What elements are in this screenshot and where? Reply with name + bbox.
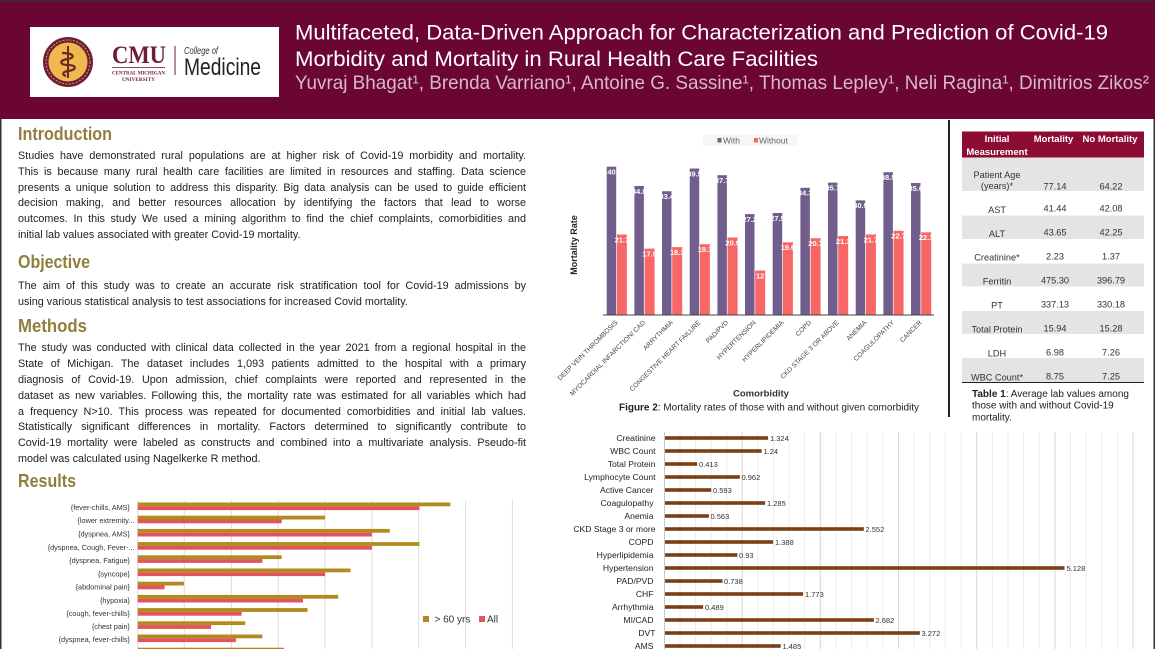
data labels: with: 39.5 — [687, 169, 702, 178]
table rows: WBC Count* — [971, 372, 1023, 382]
x axis category labels: ARRYTHMIA — [642, 319, 675, 352]
gold bars: over 60 years — [138, 502, 450, 649]
category labels: Active Cancer — [600, 485, 654, 495]
data labels: without: 22.3 — [919, 233, 934, 242]
table rows: 77.14 — [1044, 182, 1066, 192]
table rows: 7.25 — [1102, 372, 1120, 382]
text block: objective — [18, 280, 526, 308]
table rows: 43.65 — [1044, 228, 1066, 238]
category labels: {lower extremity... — [77, 516, 134, 525]
caption: table 1: mortality. — [972, 412, 1012, 424]
bars — [665, 436, 1064, 648]
table rows: 475.30 — [1041, 276, 1069, 286]
table rows: 8.75 — [1046, 372, 1064, 382]
legend: Without — [759, 136, 788, 146]
category labels: Arrhythmia — [612, 602, 654, 612]
poster title: Multifaceted, Data-Driven Approach for Characterization and Prediction of Covid-19 — [295, 20, 1108, 44]
category labels: {dyspnea, Cough, Fever-... — [48, 543, 134, 552]
table rows: 2.23 — [1046, 252, 1064, 262]
value labels: 0.962 — [742, 473, 760, 482]
CMU wordmark: CENTRAL MICHIGAN — [112, 70, 165, 76]
text block: introduction: outcomes. In this study We used a mining algorithm to find the chief complaints, comorbidities and — [18, 213, 526, 225]
category labels: {dyspnea, AMS} — [78, 530, 131, 538]
data labels: without: 18.3 — [670, 248, 685, 257]
bars: with comorbidity — [607, 167, 920, 315]
red bars: all patients — [138, 506, 419, 642]
text block: introduction: initial lab values associated with greater Covid-19 mortality. — [18, 229, 300, 241]
table rows: 396.79 — [1097, 276, 1125, 286]
y axis title: Mortality Rate — [569, 215, 579, 275]
table rows — [971, 170, 1125, 382]
table header — [966, 134, 1138, 158]
category labels: {hypoxia} — [100, 596, 131, 605]
poster title — [295, 20, 1108, 71]
x axis category labels: COAGULOPATHY — [853, 319, 897, 363]
table rows: 15.94 — [1044, 324, 1066, 334]
data labels: with: 35.6 — [908, 184, 923, 193]
chart: chief complaints mortality by age group — [48, 500, 512, 649]
table rows: 330.18 — [1097, 300, 1125, 310]
category labels: {dyspnea, Fatigue} — [69, 556, 131, 565]
category labels: Anemia — [624, 511, 654, 521]
data labels: with: 40 — [607, 168, 616, 176]
College of Medicine wordmark — [184, 45, 261, 81]
text block: introduction: decision making, and better resources allocation by identifying the factors that lead to worse — [18, 197, 526, 209]
value labels: 0.413 — [699, 460, 718, 469]
value labels: 0.563 — [710, 512, 729, 521]
data labels: without: 21.3 — [836, 237, 851, 246]
category labels: MI/CAD — [623, 615, 654, 625]
table header: Mortality — [1034, 134, 1074, 145]
data labels: without — [615, 232, 934, 280]
caption: table 1: Table 1: Average lab values among — [972, 389, 1129, 400]
caption: table 1 — [972, 389, 1129, 424]
table 1: average lab values — [962, 132, 1144, 383]
data labels: with: 35.7 — [825, 183, 840, 192]
category labels — [573, 433, 656, 649]
text block: methods — [18, 342, 526, 465]
table rows: Creatinine* — [974, 252, 1020, 262]
heading: Introduction: Introduction — [18, 124, 112, 144]
x axis category labels: MYOCARDIAL INFARCTION/ CAD — [569, 319, 647, 398]
category labels: Hypertension — [603, 563, 654, 573]
table rows: 337.13 — [1041, 300, 1069, 310]
data labels: without: 12 — [756, 271, 764, 280]
chart: figure 2 mortality by comorbidity — [557, 135, 934, 400]
category labels: {dyspnea, fever-chills} — [59, 635, 131, 644]
text block: introduction: Studies have demonstrated rural populations are at higher risk of Covid-19 morbidity and mortality. — [18, 150, 526, 162]
data labels: without: 20.9 — [725, 238, 740, 247]
College of Medicine wordmark: College of — [184, 45, 219, 57]
table rows: 41.44 — [1044, 204, 1066, 214]
data labels: without: 21.7 — [864, 235, 878, 244]
value labels: 5.128 — [1066, 564, 1085, 573]
data labels: with: 30.9 — [853, 201, 868, 210]
text block: introduction — [18, 150, 526, 241]
text block: objective: using various statistical analysis to test associations for increased Covid mortality. — [18, 296, 408, 308]
x axis category labels: CANCER — [899, 319, 924, 344]
table rows: LDH — [988, 348, 1006, 358]
text block: methods: State of Michigan. The dataset includes 1,093 patients admitted to the hospital with a primary — [18, 358, 526, 370]
text block: methods: diagnosis of Covid-19. Upon admission, chief complaints were reported and represented in the — [18, 374, 526, 386]
value labels: 2.552 — [866, 525, 884, 534]
value labels: 1.24 — [764, 447, 778, 456]
data labels: without: 17.9 — [642, 249, 657, 258]
table rows: 42.25 — [1100, 228, 1122, 238]
caption: table 1: those with and without Covid-19 — [972, 400, 1114, 412]
category labels: Lymphocyte Count — [584, 472, 656, 482]
x axis category labels: DEEP VEIN THROMBOSIS — [557, 319, 620, 382]
data labels: with — [607, 168, 923, 224]
data labels: without: 19.6 — [781, 243, 795, 252]
x axis category labels: COPD — [795, 319, 813, 338]
table rows: 64.22 — [1100, 182, 1122, 192]
heading: Methods: Methods — [18, 316, 87, 336]
category labels: DVT — [638, 628, 656, 638]
value labels: 1.388 — [775, 538, 794, 547]
x axis category labels: ANEMIA — [845, 319, 869, 342]
text block: methods: dataset as new variables. Following this, the mortality rate was estimated for all variables which had — [18, 390, 526, 402]
legend: > 60 yrs — [434, 614, 470, 626]
icon: college seal — [43, 37, 93, 87]
data labels: with: 27.2 — [742, 215, 757, 224]
value labels: 1.773 — [805, 590, 824, 599]
text block: introduction: presents a unique solution to address this disparity. Big data analysis can be used to guide efficient — [18, 182, 526, 194]
bars: without comorbidity — [617, 231, 931, 315]
table rows: 42.08 — [1100, 204, 1122, 214]
category labels: {syncope} — [98, 570, 131, 578]
category labels: PAD/PVD — [616, 576, 654, 586]
text block: methods: The study was conducted with clinical data collected in the year 2021 from a regional hospital in the — [18, 342, 526, 354]
data labels: without: 22.7 — [891, 232, 906, 241]
value labels: 1.285 — [767, 499, 786, 508]
table rows: 7.26 — [1102, 348, 1120, 358]
CMU wordmark — [112, 42, 166, 83]
x axis category labels: CKD STAGE 3 OR ABOVE — [779, 319, 841, 381]
x axis category labels: HYPERTENSION — [716, 319, 758, 361]
data labels: without: 19.1 — [698, 245, 712, 254]
table rows: PT — [991, 300, 1003, 310]
text block: methods: Statistically significant differences in mortality. Factors determined to significantly contribute to — [18, 421, 526, 433]
category labels: Coagulopathy — [600, 498, 654, 508]
table rows: (years)* — [981, 181, 1013, 191]
category labels: {fever-chills, AMS} — [71, 503, 131, 512]
heading: Objective: Objective — [18, 252, 90, 272]
category labels: WBC Count — [610, 446, 656, 456]
text block: objective: The aim of this study was to create an accurate risk stratification tool for Covid-19 admissions by — [18, 280, 526, 292]
authors: Yuvraj Bhagat¹, Brenda Varriano¹, Antoine G. Sassine¹, Thomas Lepley¹, Neli Ragina¹, Dimitrios Zikos² — [295, 72, 1149, 94]
category labels: {chest pain} — [92, 622, 131, 631]
legend: All — [487, 614, 498, 626]
category labels: Total Protein — [608, 459, 656, 469]
College of Medicine wordmark: Medicine — [184, 54, 261, 81]
table header: Measurement — [966, 147, 1028, 158]
table rows: 1.37 — [1102, 252, 1120, 262]
value labels: 3.272 — [922, 629, 940, 638]
table rows: AST — [988, 205, 1006, 215]
CMU wordmark: CMU — [112, 42, 166, 69]
poster title: Morbidity and Mortality in Rural Health Care Facilities — [295, 47, 818, 71]
category labels: {abdominal pain} — [76, 582, 131, 592]
chart: predictors of mortality — [573, 432, 1133, 649]
data labels: with: 37.7 — [715, 176, 730, 185]
category labels: Creatinine — [616, 433, 656, 443]
data labels: without: 21.7 — [615, 235, 629, 244]
text block: introduction: This is because many rural health care facilities are limited in resources and staffing. Data science — [18, 166, 526, 178]
legend: With — [723, 136, 740, 146]
value labels: 0.593 — [713, 486, 732, 495]
table rows: Total Protein — [971, 324, 1023, 334]
table rows: ALT — [989, 229, 1005, 239]
data labels: without: 20.7 — [808, 239, 823, 248]
x axis category labels: HYPERLIPIDEMIA — [741, 319, 786, 364]
table header: Initial — [985, 134, 1009, 145]
category labels: COPD — [629, 537, 654, 547]
legend — [703, 135, 798, 146]
value labels — [699, 434, 1085, 649]
table rows: 15.28 — [1100, 324, 1122, 334]
value labels: 0.93 — [739, 551, 754, 560]
table rows: Patient Age — [974, 170, 1020, 180]
x axis title: Comorbidity — [733, 388, 790, 400]
value labels: 2.682 — [876, 616, 894, 625]
heading: Results: Results — [18, 471, 76, 491]
data labels: with: 27.5 — [770, 214, 785, 223]
category labels: CKD Stage 3 or more — [573, 524, 656, 534]
text block: methods: model was calculated using Nagelkerke R method. — [18, 453, 260, 465]
caption: figure 2: Figure 2: Mortality rates of those with and without given comorbidity — [619, 402, 919, 414]
category labels: {cough, fever-chills} — [66, 609, 131, 618]
CMU wordmark: UNIVERSITY — [122, 77, 155, 83]
value labels: 0.489 — [705, 603, 724, 612]
table rows: 6.98 — [1046, 348, 1064, 358]
header banner — [0, 0, 1155, 119]
category labels: CHF — [636, 589, 654, 599]
logo panel — [30, 27, 279, 97]
table rows: Ferritin — [983, 276, 1011, 286]
value labels: 0.738 — [724, 577, 743, 586]
value labels: 1.324 — [770, 434, 789, 443]
legend — [423, 614, 498, 626]
data labels: with: 33.4 — [659, 192, 675, 201]
category labels — [48, 503, 134, 644]
text block: methods: a frequency N>10. This process was repeated for documented comorbidities and initial lab values. — [18, 406, 526, 418]
data labels: with: 38.5 — [881, 173, 896, 182]
x axis category labels: CONGESTIVE HEART FAILURE — [629, 319, 703, 393]
category labels: Hyperlipidemia — [597, 550, 654, 560]
table header: No Mortality — [1083, 134, 1138, 145]
x axis category labels — [557, 319, 924, 398]
x axis category labels: PAD/PVD — [705, 319, 730, 345]
data labels: with: 34.3 — [798, 189, 813, 198]
data labels: with: 34.8 — [632, 187, 647, 196]
text block: methods: Covid-19 mortality were labeled as constructs and combined into a multivariate analysis. Pseudo-fit — [18, 437, 526, 449]
